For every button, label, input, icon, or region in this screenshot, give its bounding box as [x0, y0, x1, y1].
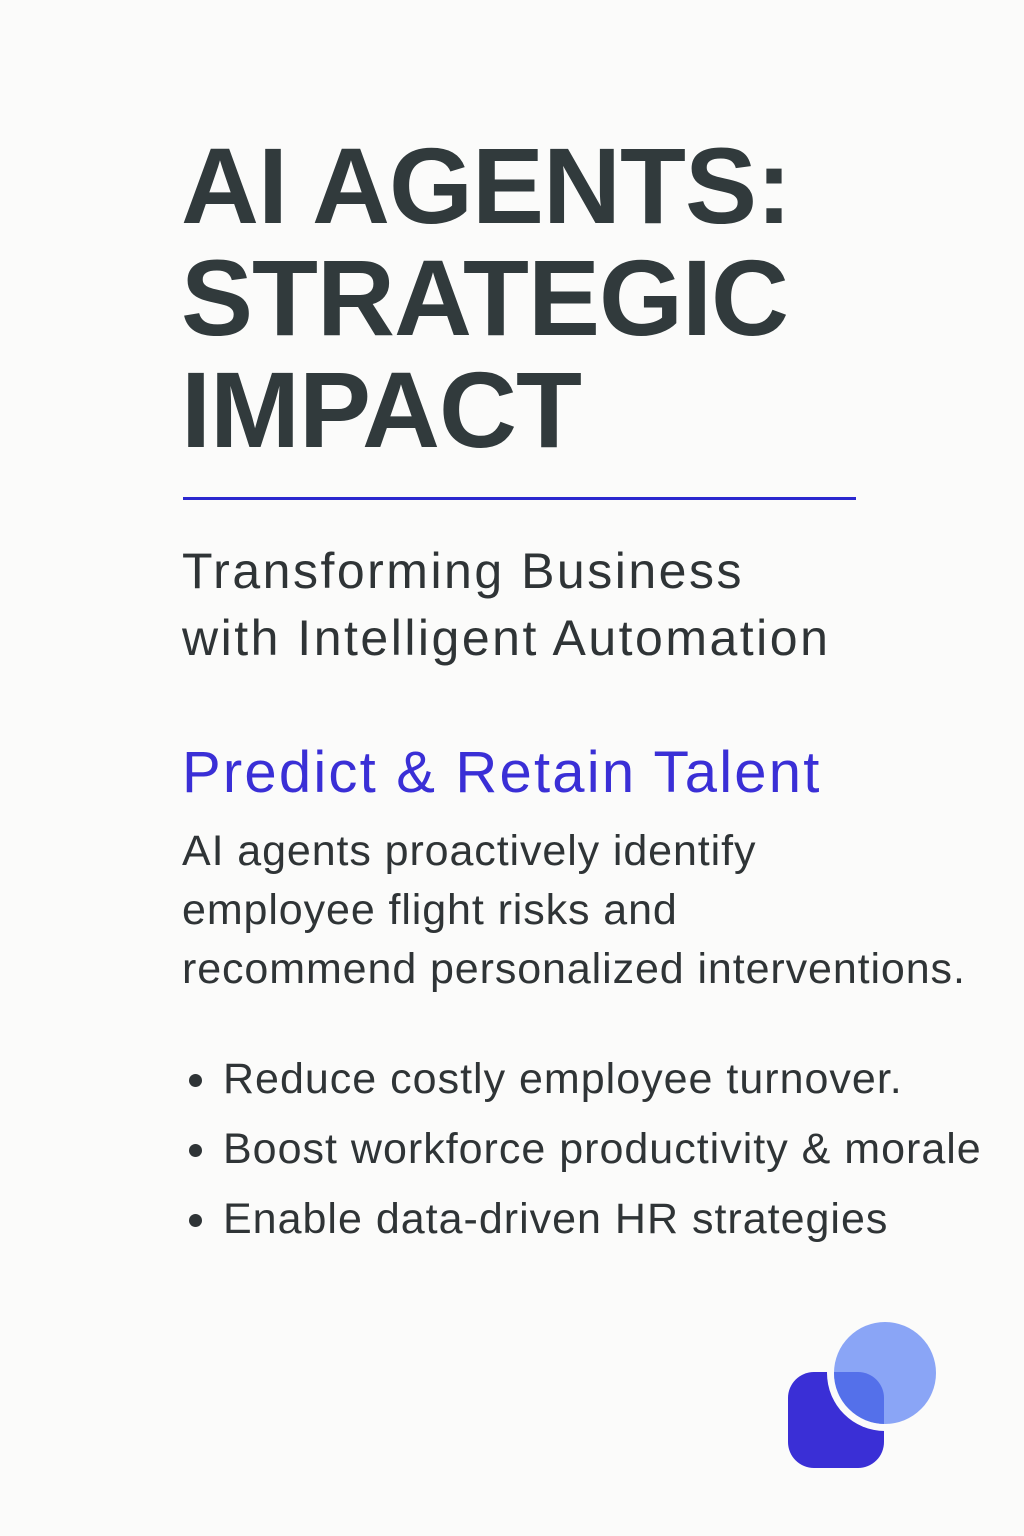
bullet list: Enable data-driven HR strategies — [223, 1195, 888, 1243]
bullet list — [189, 1055, 982, 1243]
title: AI AGENTS: — [181, 125, 791, 246]
section heading: Predict & Retain Talent — [182, 740, 822, 805]
description paragraph: recommend personalized interventions. — [182, 945, 966, 993]
description paragraph: employee flight risks and — [182, 886, 678, 934]
bullet list: Boost workforce productivity & morale — [223, 1125, 982, 1173]
title: STRATEGIC — [181, 237, 788, 358]
icon: logo — [788, 1322, 936, 1468]
description paragraph: AI agents proactively identify — [182, 827, 756, 875]
title — [181, 125, 791, 470]
title: IMPACT — [181, 349, 581, 470]
subtitle: with Intelligent Automation — [182, 610, 830, 666]
bullet list: Reduce costly employee turnover. — [223, 1055, 903, 1103]
subtitle: Transforming Business — [182, 543, 744, 599]
subtitle — [182, 543, 830, 666]
description paragraph — [182, 827, 966, 993]
